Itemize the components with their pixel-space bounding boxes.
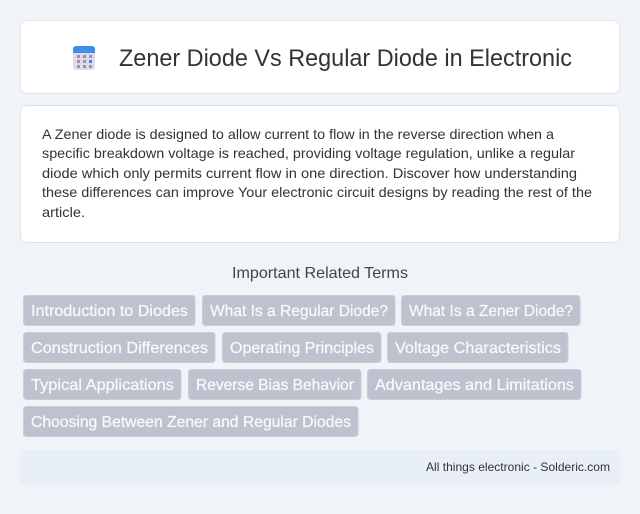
text block: description: specific breakdown voltage is reached, providing voltage regulation, unlike a regular	[42, 145, 575, 161]
tag: Reverse Bias Behavior	[196, 377, 355, 394]
text block: description	[42, 126, 592, 220]
text block: description: article.	[42, 204, 85, 220]
panel: description	[20, 106, 620, 242]
text block: description: diode which only permits current flow in one direction. Discover how understanding	[42, 165, 577, 181]
tag	[24, 406, 358, 436]
tag	[24, 296, 195, 326]
tag: Advantages and Limitations	[375, 377, 574, 394]
text block: description: these differences can improve Your electronic circuit designs by reading the rest of the	[42, 184, 592, 200]
tag: What Is a Zener Diode?	[409, 303, 573, 320]
tag	[368, 370, 581, 400]
tag	[222, 332, 381, 362]
panel: title card	[20, 20, 620, 94]
footer bar	[20, 450, 620, 484]
tag	[24, 332, 215, 362]
tag	[388, 332, 568, 362]
text block: description: A Zener diode is designed to allow current to flow in the reverse direction when a	[42, 126, 554, 142]
tag	[188, 370, 361, 400]
title: Zener Diode Vs Regular Diode in Electronic	[119, 45, 572, 72]
tag: Choosing Between Zener and Regular Diodes	[31, 414, 351, 431]
tag	[402, 296, 580, 326]
tag: Construction Differences	[31, 340, 208, 357]
tag: What Is a Regular Diode?	[210, 303, 388, 320]
tag: Voltage Characteristics	[395, 340, 561, 357]
heading: related terms: Important Related Terms	[232, 265, 408, 282]
footer credit: All things electronic - Solderic.com	[426, 460, 610, 474]
tag: Typical Applications	[31, 377, 174, 394]
tag list: related terms	[24, 296, 581, 436]
icon: calendar	[73, 46, 95, 70]
tag: Introduction to Diodes	[31, 303, 188, 320]
tag	[24, 370, 181, 400]
tag: Operating Principles	[230, 340, 374, 357]
tag	[202, 296, 395, 326]
